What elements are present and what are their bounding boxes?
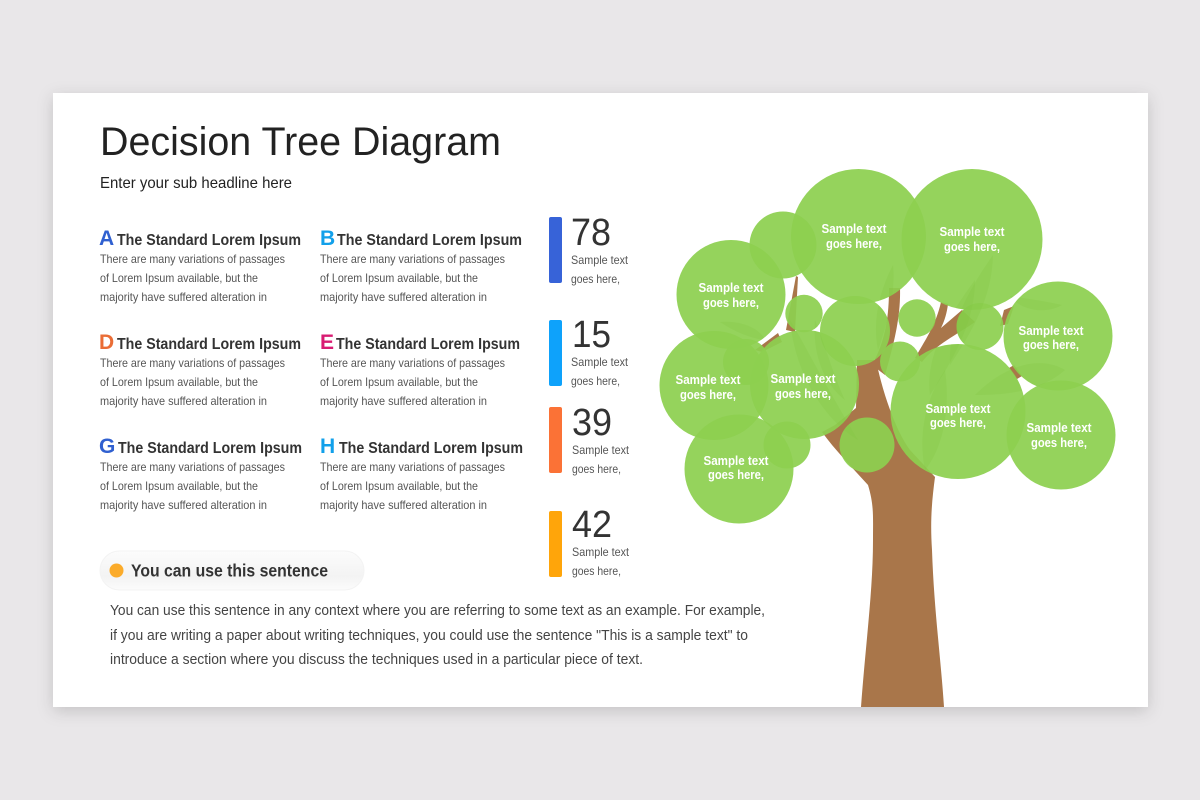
text block B: The Standard Lorem Ipsum <box>337 232 522 249</box>
canopy labels: Sample text <box>676 373 741 387</box>
tree trunk and branches <box>755 276 1022 707</box>
stat 15: goes here, <box>571 374 620 388</box>
text block A: majority have suffered alteration in <box>100 290 267 304</box>
canopy labels: goes here, <box>775 387 831 401</box>
title: Decision Tree Diagram <box>100 120 501 164</box>
text block D: majority have suffered alteration in <box>100 394 267 408</box>
text block B: B <box>320 227 335 250</box>
subtitle: Enter your sub headline here <box>100 175 292 192</box>
text block B: majority have suffered alteration in <box>320 290 487 304</box>
text block G <box>99 435 302 512</box>
panel: white slide card <box>53 93 1148 707</box>
text block E: of Lorem Ipsum available, but the <box>320 375 478 389</box>
canopy labels: goes here, <box>930 416 986 430</box>
paragraph text <box>110 603 765 668</box>
canopy labels: Sample text <box>1018 324 1084 338</box>
canopy labels: goes here, <box>826 237 882 251</box>
text block A: A <box>99 227 114 250</box>
canopy labels: Sample text <box>1026 421 1092 435</box>
stat 15: 15 <box>572 314 611 356</box>
callout pill heading: You can use this sentence <box>131 560 328 580</box>
text block B: There are many variations of passages <box>320 252 505 266</box>
text block E: The Standard Lorem Ipsum <box>336 336 520 353</box>
text block G: The Standard Lorem Ipsum <box>118 440 302 457</box>
tree diagram <box>660 169 1116 707</box>
canopy labels: goes here, <box>944 240 1000 254</box>
text block D: There are many variations of passages <box>100 356 285 370</box>
text block G: G <box>99 435 115 458</box>
canopy labels: goes here, <box>680 388 736 402</box>
paragraph text: You can use this sentence in any context where you are referring to some text as an example. For example, <box>110 603 765 619</box>
text block E <box>320 331 520 408</box>
canopy labels: Sample text <box>698 281 764 295</box>
canopy labels: Sample text <box>704 454 769 468</box>
text block H: H <box>320 435 335 458</box>
canopy labels <box>676 222 1092 482</box>
text block E: majority have suffered alteration in <box>320 394 487 408</box>
canopy labels: goes here, <box>708 468 764 482</box>
text block B: of Lorem Ipsum available, but the <box>320 271 478 285</box>
stat 15: Sample text <box>571 355 629 369</box>
text block D: D <box>99 331 114 354</box>
text block E: E <box>320 331 334 354</box>
stat 78: 78 <box>571 212 611 254</box>
faint leaf shapes <box>762 283 1037 390</box>
text block D <box>99 331 301 408</box>
stat 39 <box>549 402 630 476</box>
tree canopy circles <box>660 169 1116 524</box>
stat 42: goes here, <box>572 564 621 578</box>
text block E: There are many variations of passages <box>320 356 505 370</box>
text block D: of Lorem Ipsum available, but the <box>100 375 258 389</box>
paragraph text: if you are writing a paper about writing techniques, you could use the sentence "This is a sample text" to <box>110 628 748 644</box>
stat 78: Sample text <box>571 253 629 267</box>
stat 42: 42 <box>572 504 612 546</box>
stat 39: goes here, <box>572 462 621 476</box>
canopy labels: goes here, <box>703 296 759 310</box>
callout pill heading <box>100 551 364 590</box>
canopy labels: goes here, <box>1031 436 1087 450</box>
stat 78: goes here, <box>571 272 620 286</box>
text block H: There are many variations of passages <box>320 460 505 474</box>
canopy labels: Sample text <box>926 402 991 416</box>
canopy labels: Sample text <box>940 225 1005 239</box>
text block G: majority have suffered alteration in <box>100 498 267 512</box>
text block H: The Standard Lorem Ipsum <box>339 440 523 457</box>
text block B <box>320 227 522 304</box>
paragraph text: introduce a section where you discuss the techniques used in a particular piece of text. <box>110 652 643 668</box>
canopy labels: Sample text <box>822 222 887 236</box>
stat 78 <box>549 212 629 286</box>
text block H: of Lorem Ipsum available, but the <box>320 479 478 493</box>
stat 42: Sample text <box>572 545 630 559</box>
stat 15 <box>549 314 629 388</box>
text block H: majority have suffered alteration in <box>320 498 487 512</box>
text block A: The Standard Lorem Ipsum <box>117 232 301 249</box>
text block A: There are many variations of passages <box>100 252 285 266</box>
text block G: of Lorem Ipsum available, but the <box>100 479 258 493</box>
text block D: The Standard Lorem Ipsum <box>117 336 301 353</box>
text block H <box>320 435 523 512</box>
stat 42 <box>549 504 630 578</box>
stat 39: Sample text <box>572 443 630 457</box>
canopy labels: goes here, <box>1023 338 1079 352</box>
canopy labels: Sample text <box>770 372 836 386</box>
text block A: of Lorem Ipsum available, but the <box>100 271 258 285</box>
text block G: There are many variations of passages <box>100 460 285 474</box>
text block A <box>99 227 301 304</box>
stat 39: 39 <box>572 402 612 444</box>
